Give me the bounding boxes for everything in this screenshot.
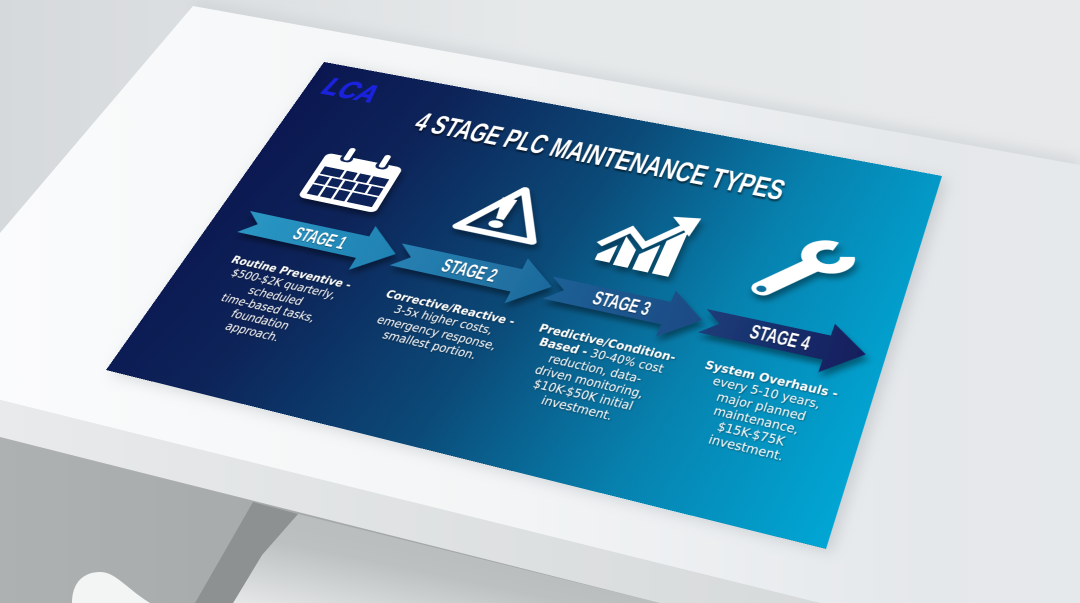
icon: warning triangle <box>457 181 556 242</box>
text: stage 2 description <box>374 288 518 362</box>
panel: poster <box>106 62 942 549</box>
icon: growth chart <box>591 202 701 278</box>
text: stage 4 description: maintenance, <box>712 404 801 437</box>
text: stage 4 description: System Overhauls - <box>703 358 840 401</box>
text: stage 3 description: Predictive/Condition- <box>537 321 678 364</box>
text: stage 1 description: scheduled <box>246 284 306 308</box>
icon: wrench <box>755 235 851 307</box>
arrow: stage 4 <box>692 298 873 381</box>
text: stage 4 description: every 5-10 years, <box>711 374 822 411</box>
text: stage 2 description: 3-5x higher costs, <box>391 303 496 337</box>
text: stage 1 description: time-based tasks, <box>218 291 318 324</box>
text: stage 3 description: $10K-$50K initial <box>531 377 635 413</box>
stage 1 label: STAGE 1 <box>289 223 351 253</box>
text: stage 4 description <box>703 358 840 464</box>
stage 3 label: STAGE 3 <box>589 287 655 319</box>
stage 4 label: STAGE 4 <box>747 320 813 354</box>
arrow: stage 1 <box>228 201 408 277</box>
text: stage 1 description: foundation <box>228 307 292 332</box>
text: stage 2 description: Corrective/Reactive - <box>383 288 518 328</box>
text: stage 4 description: major planned <box>715 390 808 423</box>
text: stage 1 description: Routine Preventive - <box>229 253 354 291</box>
stage 2 label: STAGE 2 <box>438 255 502 286</box>
logo: LCA <box>317 73 385 108</box>
arrow: stage 2 <box>382 233 562 311</box>
text: stage 3 description: driven monitoring, <box>533 363 646 401</box>
text: stage 1 description: approach. <box>222 320 283 344</box>
text: stage 3 description <box>531 321 678 423</box>
title: 4 STAGE PLC MAINTENANCE TYPES <box>409 107 790 206</box>
icon: calendar <box>298 144 409 213</box>
text: stage 3 description: investment. <box>539 394 615 423</box>
arrow: stage 3 <box>536 266 711 345</box>
text: stage 1 description <box>218 253 354 344</box>
text: stage 1 description: $500-$2K quarterly, <box>228 267 339 301</box>
text: stage 3 description: Based - 30-40% cost <box>537 335 666 376</box>
text: stage 4 description: $15K-$75K <box>715 419 787 449</box>
text: stage 4 description: investment. <box>706 432 786 464</box>
text: stage 3 description: reduction, data- <box>546 352 644 385</box>
graphics: icons and arrows <box>237 148 871 379</box>
text: stage 2 description: emergency response, <box>374 313 499 352</box>
text: stage 2 description: smallest portion. <box>380 328 479 362</box>
